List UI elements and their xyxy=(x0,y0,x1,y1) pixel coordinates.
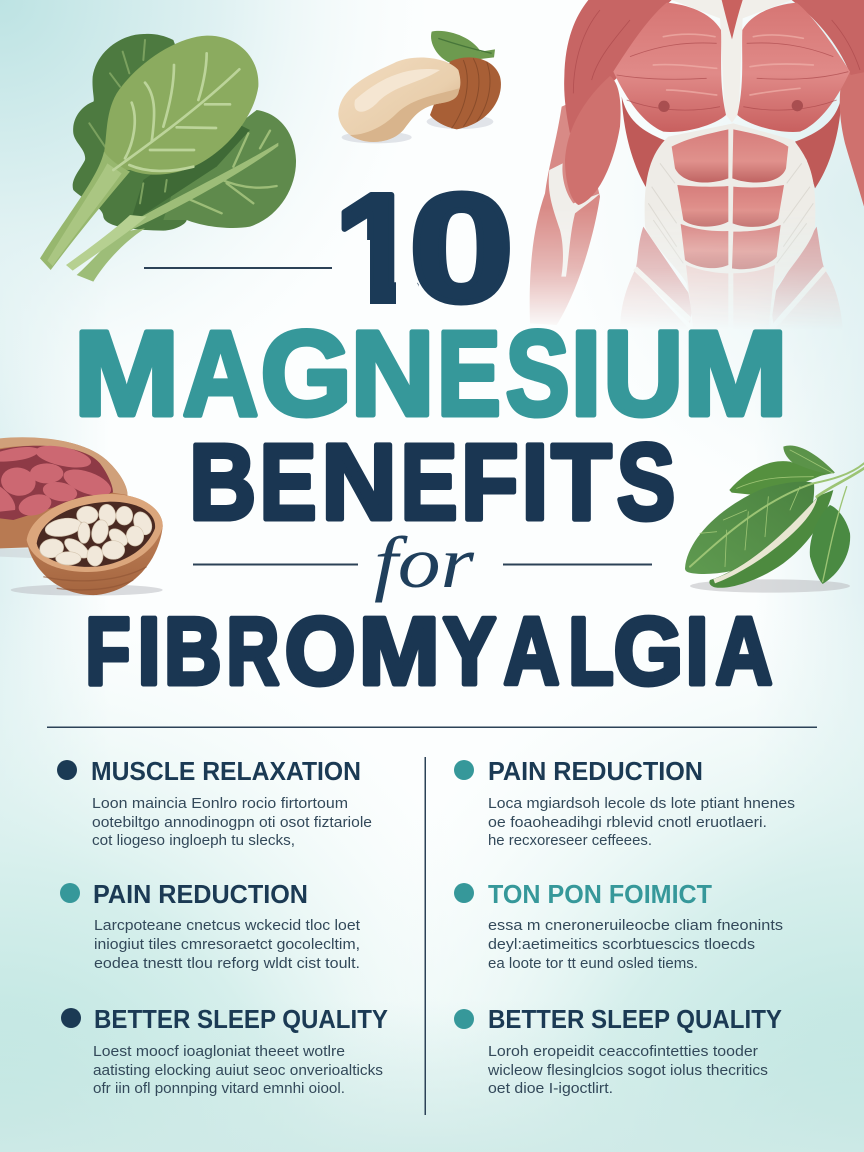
vertical divider xyxy=(424,757,426,1115)
heading: fibromyalgia: Y xyxy=(443,598,496,705)
item heading: TON PON FOIMICT xyxy=(488,879,712,909)
number 10: 0 xyxy=(409,162,514,334)
heading: magnesium: G xyxy=(260,305,352,441)
item body: Loroh eropeidit ceaccofintetties tooder xyxy=(488,1044,758,1060)
item heading: PAIN REDUCTION xyxy=(93,879,308,909)
item body xyxy=(92,796,372,849)
illustration: green leaf with pod xyxy=(685,446,864,593)
illustration: bowls of nuts xyxy=(0,437,163,596)
item body xyxy=(94,918,360,972)
item body: eodea tnestt tlou reforg wldt cist toult. xyxy=(94,956,360,972)
heading: magnesium: N xyxy=(350,305,435,441)
horizontal divider xyxy=(47,726,817,728)
item body: Larcpoteane cnetcus wckecid tloc loet xyxy=(94,918,360,934)
heading: benefits: S xyxy=(617,421,675,542)
heading: magnesium: I xyxy=(571,305,601,441)
benefit: pain reduction left xyxy=(60,879,360,972)
left wrist tendon xyxy=(549,163,600,277)
illustration: peanut and hazelnut xyxy=(338,31,501,143)
pectoral highlights xyxy=(653,34,813,95)
benefit: pain reduction right xyxy=(454,756,795,849)
upper left ab xyxy=(672,129,728,182)
left serratus xyxy=(622,97,668,188)
heading: benefits: E xyxy=(401,421,458,542)
heading: benefits: E xyxy=(260,421,316,542)
rule left of number xyxy=(144,267,332,269)
item body: Loon maincia Eonlro rocio firtortoum xyxy=(92,796,348,812)
bullet xyxy=(454,760,474,780)
item body: aatisting elocking auiut seoc onverioalticks xyxy=(93,1063,383,1079)
number 10: 1 xyxy=(334,162,420,334)
heading: fibromyalgia: R xyxy=(226,598,279,705)
item body xyxy=(488,796,795,849)
bullet xyxy=(454,1009,474,1029)
heading: magnesium: A xyxy=(182,305,258,441)
pubic abs xyxy=(686,265,728,314)
heading: magnesium: M xyxy=(74,305,180,441)
item heading: PAIN REDUCTION xyxy=(488,756,703,786)
item body: oet dioe I-igoctlirt. xyxy=(488,1081,613,1097)
benefit: ton pon foimict xyxy=(454,879,783,972)
benefit: muscle relaxation xyxy=(57,756,372,849)
pectoral fibers xyxy=(573,10,860,110)
heading: fibromyalgia: B xyxy=(164,598,222,705)
right pectoral xyxy=(737,3,850,132)
left pectoral xyxy=(613,3,726,132)
heading: fibromyalgia: O xyxy=(285,598,355,705)
chest center xyxy=(672,0,792,123)
lower hip muscles xyxy=(635,227,693,323)
heading: magnesium: M xyxy=(683,305,788,441)
nipples xyxy=(658,101,670,112)
item body: wicleow flesinglcios sogot iolus thecritics xyxy=(487,1063,768,1079)
item body xyxy=(488,918,783,972)
right deltoid xyxy=(792,0,864,75)
heading: fibromyalgia: A xyxy=(716,598,772,705)
item body: ootebiltgo annodinogpn oti osot fiztariole xyxy=(92,815,372,831)
sheath fibers xyxy=(648,163,813,263)
headline group xyxy=(74,162,788,705)
heading: fibromyalgia: I xyxy=(686,598,709,705)
word: for: for xyxy=(374,522,475,603)
item body: Loca mgiardsoh lecole ds lote ptiant hnenes xyxy=(488,796,795,812)
item body: iniogiut tiles cmresoraetct gocolecltim, xyxy=(94,937,360,953)
right arm xyxy=(840,60,864,207)
illustration: spinach leaves xyxy=(40,34,296,282)
item heading: BETTER SLEEP QUALITY xyxy=(94,1004,388,1034)
bullet xyxy=(60,883,80,903)
heading: fibromyalgia: G xyxy=(614,598,683,705)
heading: benefits: T xyxy=(551,421,612,542)
middle right ab xyxy=(733,185,784,227)
heading: benefits: B xyxy=(189,421,256,542)
item body: ea loote tor tt eund osled tiems. xyxy=(488,956,698,972)
item body: oe foaoheadihgi rblevid cnotl eruotlaeri. xyxy=(488,815,767,831)
item body: deyl:aetimeitics scorbtuescics tloecds xyxy=(488,937,755,953)
rule left of for xyxy=(193,564,358,566)
heading: magnesium: S xyxy=(506,305,570,441)
heading: magnesium: E xyxy=(437,305,501,441)
upper right ab xyxy=(732,129,788,182)
item body: Loest moocf ioagloniat theeet wotlre xyxy=(93,1044,345,1060)
heading: fibromyalgia: A xyxy=(504,598,560,705)
left deltoid xyxy=(564,0,672,133)
rule right of for xyxy=(503,564,652,566)
benefit: better sleep quality left xyxy=(61,1004,388,1097)
heading: fibromyalgia: I xyxy=(138,598,161,705)
left forearm xyxy=(530,100,600,325)
middle left ab xyxy=(677,185,728,227)
heading: fibromyalgia: F xyxy=(85,598,131,705)
heading: benefits: N xyxy=(321,421,397,542)
heading: magnesium: U xyxy=(603,305,683,441)
bullet xyxy=(61,1008,81,1028)
illustration: muscular torso xyxy=(530,0,864,337)
bullet xyxy=(454,883,474,903)
item body: essa m cneroneruileocbe cliam fneonints xyxy=(488,918,783,934)
lower left ab xyxy=(681,224,728,268)
item body xyxy=(93,1044,383,1097)
benefit: better sleep quality right xyxy=(454,1004,782,1097)
item heading: BETTER SLEEP QUALITY xyxy=(488,1004,782,1034)
item body: he recxoreseer ceffeees. xyxy=(488,833,652,849)
item body xyxy=(487,1044,768,1097)
item body: ofr iin ofl ponnping vitard emnhi oiool. xyxy=(93,1081,345,1097)
heading: fibromyalgia: M xyxy=(359,598,440,705)
heading: benefits: F xyxy=(461,421,518,542)
abdominal sheath xyxy=(645,123,815,330)
heading: fibromyalgia: L xyxy=(568,598,614,705)
left bicep xyxy=(565,76,621,205)
item body: cot liogeso ingloeph tu slecks, xyxy=(92,833,295,849)
right serratus xyxy=(795,97,842,188)
heading: benefits: I xyxy=(522,421,548,542)
item heading: MUSCLE RELAXATION xyxy=(91,756,361,786)
bullet xyxy=(57,760,77,780)
lower right ab xyxy=(732,225,781,269)
